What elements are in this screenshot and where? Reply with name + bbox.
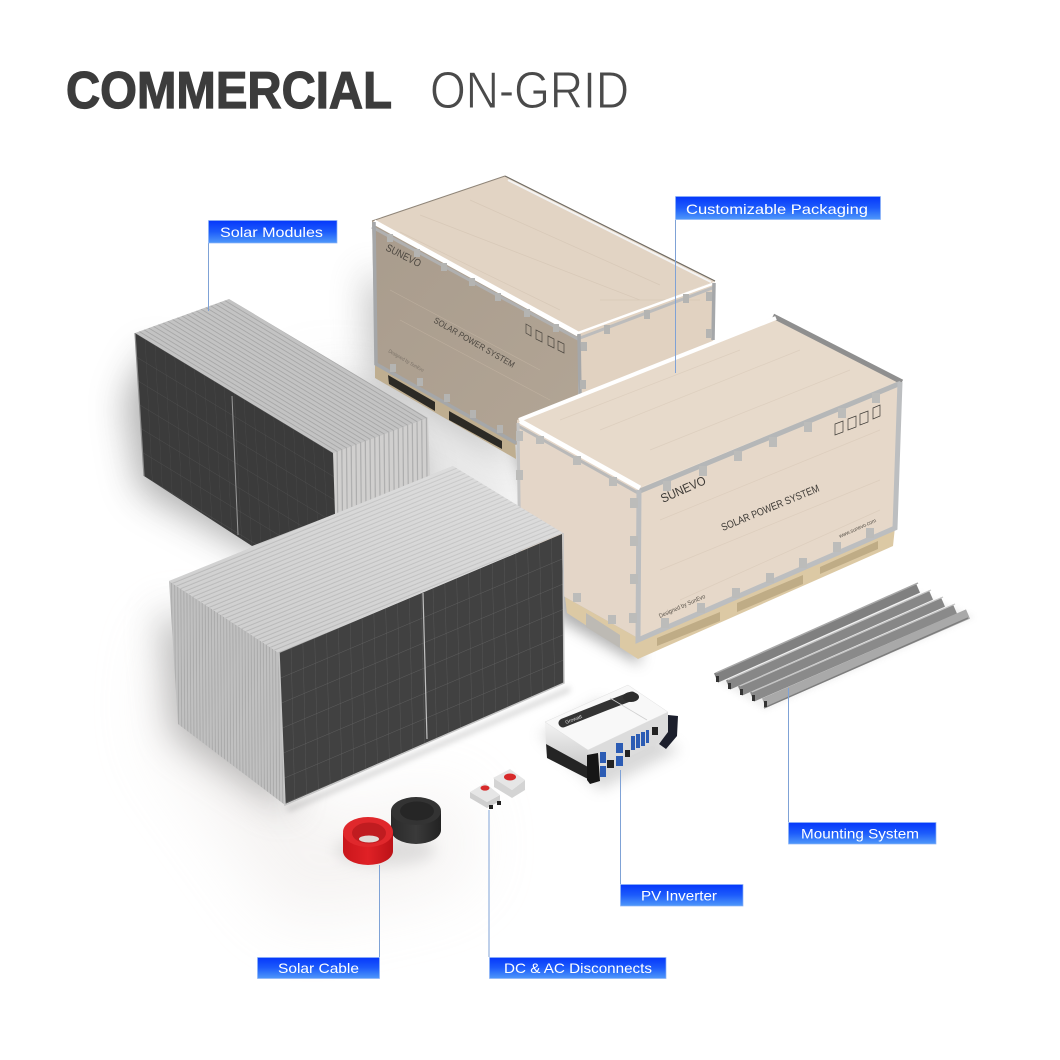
mounting rails — [715, 583, 975, 710]
front crate product text: SOLAR POWER SYSTEM — [720, 483, 821, 534]
inverter side — [545, 722, 588, 767]
label text: PV Inverter — [641, 888, 717, 904]
cable shadow — [335, 834, 435, 866]
front stack top — [169, 466, 563, 653]
rail 2 — [728, 590, 931, 685]
rail shadow — [715, 592, 975, 710]
front crate frame — [518, 316, 902, 640]
label box — [258, 958, 380, 978]
inverter handle — [659, 715, 678, 749]
rail 1 — [716, 583, 918, 678]
leader — [620, 770, 622, 884]
front crate clips — [516, 393, 880, 628]
solar cable rolls — [335, 797, 441, 866]
callout: solar cable — [258, 865, 380, 978]
inverter display bar — [563, 696, 632, 723]
label box — [490, 958, 666, 978]
inverter lower housing — [546, 743, 588, 779]
callout: mounting system — [788, 688, 936, 844]
front wooden crate — [516, 316, 902, 659]
front crate wood grain — [560, 350, 880, 600]
back crate clips — [387, 234, 712, 433]
label text: Mounting System — [801, 826, 919, 842]
front stack left side — [169, 581, 285, 805]
back crate handling icons — [526, 324, 564, 353]
back stack side — [333, 418, 430, 516]
callout: disconnects — [489, 810, 666, 978]
label box — [788, 822, 936, 844]
front crate top — [517, 316, 901, 488]
front panel stack — [169, 466, 564, 805]
inverter lid divider — [610, 698, 647, 720]
inverter dial — [623, 692, 639, 702]
leader — [208, 243, 210, 311]
label text: DC & AC Disconnects — [504, 960, 652, 976]
pv inverter — [540, 685, 680, 790]
back wooden crate — [372, 176, 715, 459]
back crate pallet — [375, 360, 516, 459]
label text: Customizable Packaging — [686, 201, 868, 217]
leader — [488, 810, 490, 957]
back crate credit: Designed by SunEvo — [387, 349, 425, 374]
label box — [676, 196, 880, 220]
label text: Solar Modules — [220, 224, 323, 240]
back crate brand: SUNEVO — [384, 242, 423, 270]
front stack sheen — [169, 466, 563, 653]
rail 5 — [764, 614, 968, 708]
front crate left face — [517, 420, 639, 638]
black cable — [391, 797, 441, 844]
callout: solar modules — [208, 220, 337, 311]
front crate website: www.sunevo.com — [838, 518, 878, 540]
title — [66, 62, 629, 120]
inverter top — [545, 685, 668, 750]
inverter left bracket — [587, 753, 600, 784]
red cable — [343, 817, 393, 865]
leader — [378, 865, 380, 957]
back stack top — [135, 299, 428, 453]
label box — [620, 884, 743, 906]
rail 4 — [752, 604, 955, 697]
back crate long face — [372, 221, 578, 445]
title: on-grid: ON-GRID — [430, 62, 629, 120]
front crate credit: Designed by SunEvo — [658, 594, 707, 620]
rail ends — [716, 676, 767, 707]
large disconnect — [493, 769, 525, 798]
back crate product text: SOLAR POWER SYSTEM — [432, 315, 517, 370]
label text: Solar Cable — [278, 960, 359, 976]
front crate handling icons — [835, 405, 880, 435]
back crate wood grain — [390, 200, 700, 400]
inverter front panel — [588, 712, 668, 772]
inverter connector bases — [607, 727, 658, 768]
leader — [674, 220, 676, 373]
back crate top — [372, 176, 715, 333]
front crate brand: SUNEVO — [659, 473, 708, 506]
callout: pv inverter — [620, 770, 743, 906]
inverter shadow — [540, 700, 680, 790]
inverter connectors — [600, 730, 649, 777]
back panel stack — [135, 299, 430, 546]
leader — [788, 688, 790, 822]
back crate end face — [578, 281, 715, 400]
label box — [208, 220, 337, 243]
dc and ac disconnects — [470, 769, 525, 809]
rail 3 — [740, 597, 943, 691]
back crate frame — [372, 176, 505, 221]
front crate front face — [638, 381, 901, 640]
inverter brand: Growatt — [565, 714, 584, 726]
back stack panel face — [135, 333, 335, 546]
title: commercial: COMMERCIAL — [66, 62, 392, 120]
front crate pallet — [565, 527, 895, 659]
callout: packaging — [676, 196, 880, 373]
ground shadows — [125, 270, 640, 920]
small disconnect — [470, 783, 501, 809]
front stack panel face — [279, 534, 564, 804]
